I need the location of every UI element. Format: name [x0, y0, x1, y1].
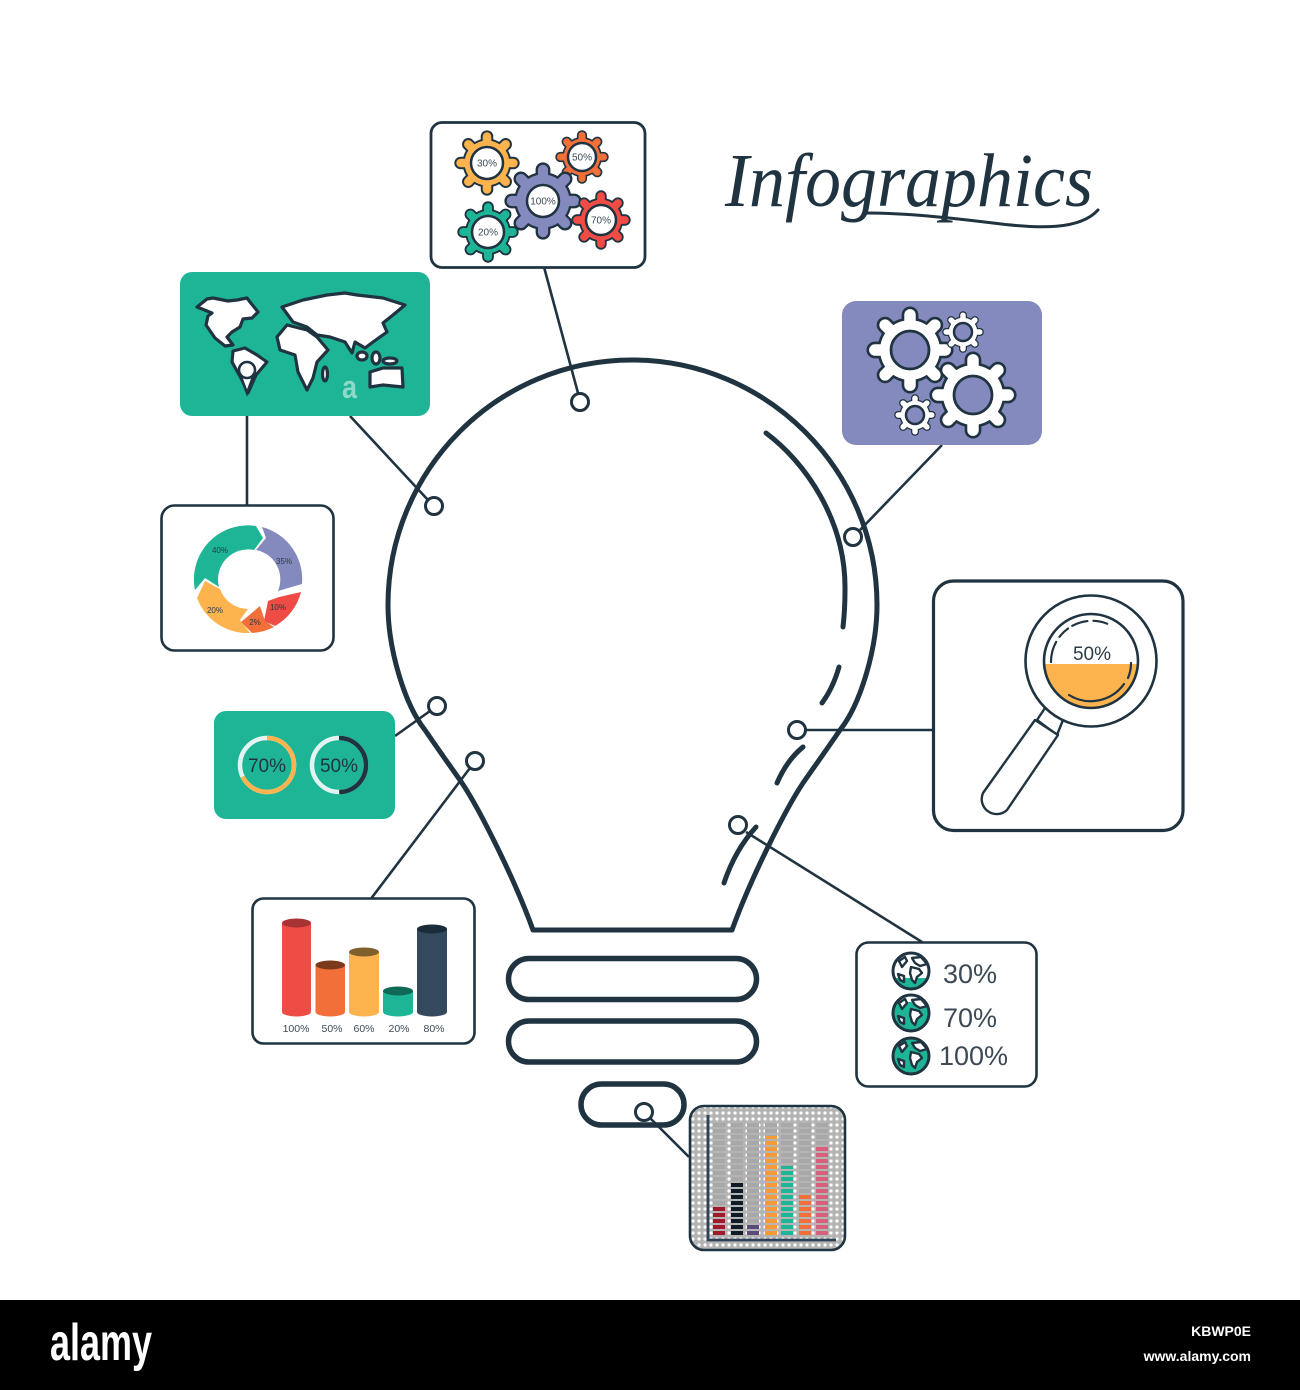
ring 50% — [312, 738, 366, 792]
chart axes — [708, 1115, 836, 1240]
title: Infographics: Infographics — [724, 139, 1093, 223]
globe labels: 100% — [939, 1041, 1008, 1071]
gear big bottom — [938, 360, 1008, 430]
bar navy 80% — [417, 924, 447, 1016]
globe labels: 70% — [943, 1003, 997, 1033]
image id: KBWP0E — [1191, 1323, 1251, 1339]
bar red 100% — [282, 918, 311, 1016]
bar labels: 50% — [321, 1023, 343, 1035]
donut labels: 40% — [212, 546, 228, 555]
ring 70% — [240, 738, 294, 792]
gear 30%: 30% — [477, 158, 497, 170]
bar teal 20% — [383, 986, 413, 1016]
donut segments — [194, 525, 302, 633]
magnifying glass lens — [1026, 596, 1156, 726]
panel: cylinder bar chart — [252, 898, 474, 1044]
donut labels: 10% — [270, 603, 286, 612]
donut labels: 2% — [249, 618, 261, 627]
magnifying glass handle — [982, 708, 1063, 814]
bar labels — [283, 1023, 445, 1035]
ring 50%: 50% — [320, 756, 358, 777]
bar labels: 100% — [283, 1023, 309, 1035]
globe 70% — [893, 995, 929, 1031]
panel: lavender gears — [842, 301, 1042, 445]
gear 20%: 20% — [478, 228, 498, 238]
gear 50% — [560, 135, 604, 179]
gear small bottom — [898, 398, 932, 432]
alamy logo: alamy — [50, 1314, 152, 1372]
gear big top — [875, 315, 945, 385]
panel: progress rings — [214, 711, 395, 819]
panel: magnifier 50% — [934, 581, 1183, 830]
globe labels: 30% — [943, 959, 997, 989]
gear 100% — [512, 170, 574, 232]
connector lines — [247, 267, 942, 1157]
map pin — [239, 362, 255, 393]
footer bar — [0, 1300, 1300, 1390]
website: www.alamy.com — [1143, 1348, 1251, 1364]
bar labels: 20% — [388, 1023, 410, 1035]
gear small top — [946, 315, 980, 349]
ring 70%: 70% — [248, 756, 286, 777]
panel: donut chart — [162, 506, 334, 650]
panel: coloured gears — [431, 122, 645, 268]
panel: globes percentages — [856, 942, 1036, 1086]
gear 20% — [463, 207, 513, 257]
magnifying glass lens: 50% — [1073, 644, 1111, 665]
ghost bars — [719, 1123, 822, 1235]
gear 50%: 50% — [572, 152, 592, 164]
light bulb outline — [388, 360, 877, 1125]
connector end circles — [426, 394, 862, 1120]
bar labels: 80% — [423, 1023, 445, 1035]
bar yellow 60% — [349, 948, 379, 1016]
coloured bars — [719, 1136, 822, 1235]
globe 100% — [893, 1038, 929, 1074]
bar orange 50% — [316, 960, 345, 1016]
donut labels: 20% — [207, 606, 223, 615]
bar labels: 60% — [353, 1023, 375, 1035]
donut labels: 35% — [276, 557, 292, 566]
gear 30% — [461, 137, 513, 189]
gear 100%: 100% — [530, 196, 556, 208]
panel: segmented bar chart — [690, 1106, 845, 1250]
globe 30% — [893, 953, 929, 989]
world map continents — [197, 293, 405, 393]
watermark letter: a — [342, 369, 357, 405]
donut labels — [207, 546, 292, 627]
gear 70%: 70% — [591, 216, 611, 226]
globe labels — [939, 959, 1008, 1071]
panel: world map — [180, 272, 430, 416]
gear 70% — [577, 196, 625, 244]
